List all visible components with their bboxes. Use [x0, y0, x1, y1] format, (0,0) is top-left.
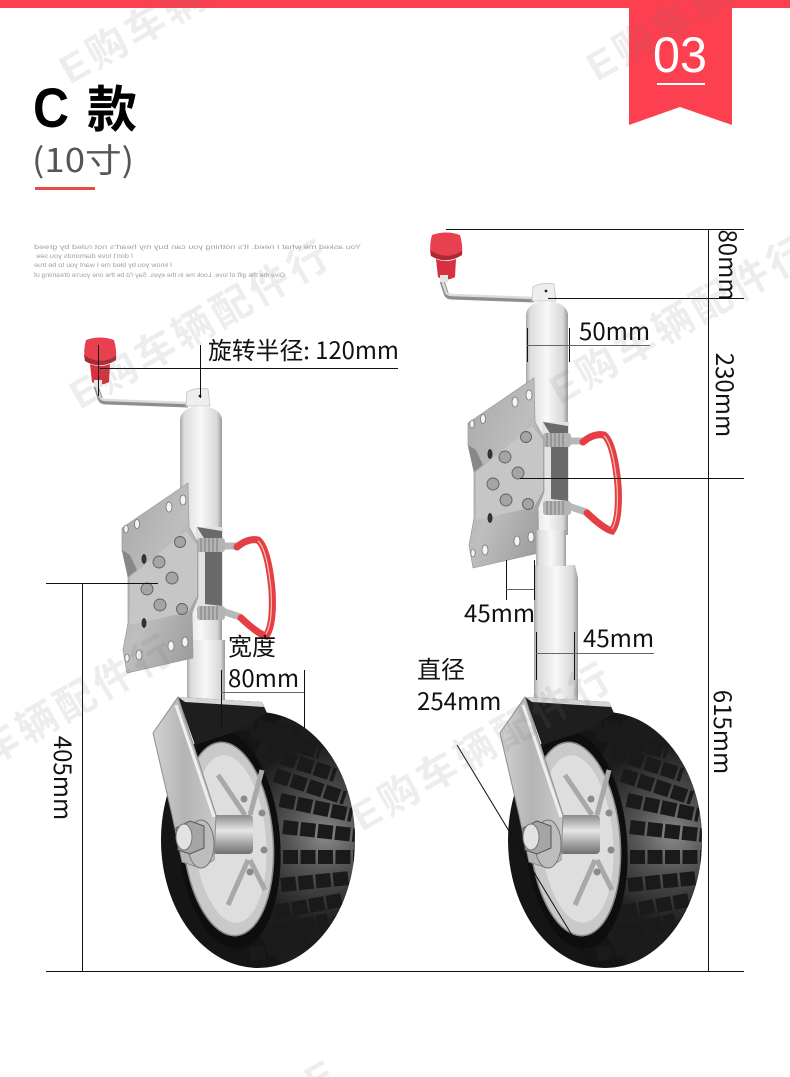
label: diameter: 直径 — [417, 650, 465, 685]
label: 615mm height: 615mm — [707, 690, 742, 774]
tiny mirrored caption: I know you by bled me I want you to be true — [33, 263, 172, 269]
label: 45mm bracket: 45mm — [464, 594, 535, 629]
title: C款: C — [33, 76, 69, 139]
watermarks: E购车辆配件行 — [344, 654, 622, 840]
product photo: right jack, extended — [430, 232, 707, 968]
label: 80mm height: 80mm — [712, 229, 747, 301]
label: 254mm diameter: 254mm — [417, 682, 501, 717]
ribbon badge with number 03 — [629, 8, 732, 125]
product photo: left jack, retracted — [84, 338, 360, 968]
title: C款: 款 — [87, 70, 137, 142]
tiny mirrored caption — [33, 245, 361, 279]
tiny mirrored caption: I don't love diamonds you see — [35, 254, 133, 260]
ribbon badge with number 03: 03 — [653, 27, 707, 83]
dimension lines: left jack — [46, 345, 744, 972]
label: width: 宽度 — [228, 627, 276, 662]
label: 50mm tube: 50mm — [579, 312, 650, 347]
watermarks: E购车辆配件行 — [62, 232, 340, 418]
subtitle underline — [35, 187, 95, 190]
tiny mirrored caption: Give me the gift of love. Look me in the eyes. Say I'd be the one you're dreaming of — [34, 273, 285, 279]
title: C款 — [33, 70, 137, 142]
label: 80mm width: 80mm — [228, 659, 299, 694]
dimension lines: right jack — [446, 229, 744, 971]
label: 230mm height: 230mm — [709, 353, 744, 437]
top red bar — [0, 0, 790, 8]
tiny mirrored caption: You asked me what I need. It's nothing you can buy my heart's not ruled by greed — [34, 245, 361, 251]
label: rotation radius: 旋转半径: 120mm — [208, 331, 399, 366]
label: 405mm height: 405mm — [47, 736, 82, 820]
label: 45mm lower tube: 45mm — [583, 619, 654, 654]
subtitle: 10寸: (10寸) — [32, 134, 134, 182]
